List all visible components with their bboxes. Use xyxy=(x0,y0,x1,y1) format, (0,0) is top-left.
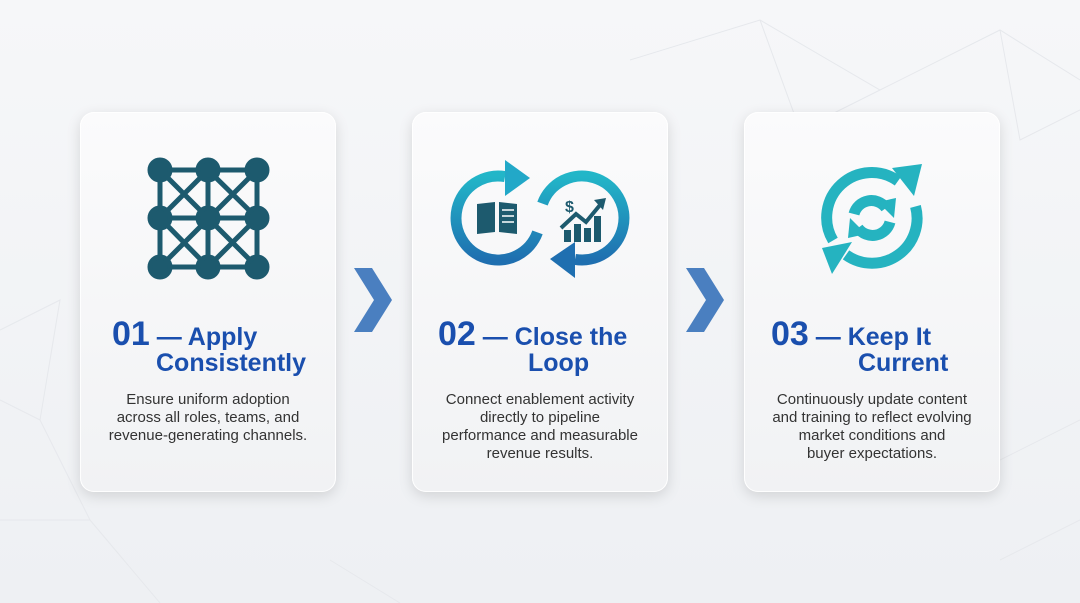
heading: Current xyxy=(858,349,948,377)
description: buyer expectations. xyxy=(807,445,937,462)
heading xyxy=(112,315,306,377)
icon: loop: $ xyxy=(565,199,574,216)
icon: refresh xyxy=(821,164,923,274)
description: market conditions and xyxy=(799,427,945,444)
card 3 xyxy=(744,112,1000,492)
heading xyxy=(438,315,627,377)
icon: loop xyxy=(450,160,630,278)
arrow 1 xyxy=(354,268,392,332)
description: and training to reflect evolving xyxy=(772,409,972,426)
description xyxy=(772,391,972,462)
heading: 03 — Keep It xyxy=(771,315,931,353)
description: Ensure uniform adoption xyxy=(126,391,290,408)
heading xyxy=(771,315,948,377)
card 1 xyxy=(80,112,336,492)
description xyxy=(109,391,307,444)
card 2 xyxy=(412,112,668,492)
description xyxy=(442,391,638,462)
icon: network grid xyxy=(148,158,270,280)
heading: Loop xyxy=(528,349,589,377)
description: performance and measurable xyxy=(442,427,638,444)
description: revenue results. xyxy=(487,445,593,462)
description: across all roles, teams, and xyxy=(117,409,299,426)
arrow 2 xyxy=(686,268,724,332)
heading: 01 — Apply xyxy=(112,315,257,353)
description: directly to pipeline xyxy=(480,409,600,426)
heading: 02 — Close the xyxy=(438,315,627,353)
description: revenue-generating channels. xyxy=(109,427,307,444)
description: Connect enablement activity xyxy=(446,391,634,408)
heading: Consistently xyxy=(156,349,306,377)
description: Continuously update content xyxy=(777,391,967,408)
